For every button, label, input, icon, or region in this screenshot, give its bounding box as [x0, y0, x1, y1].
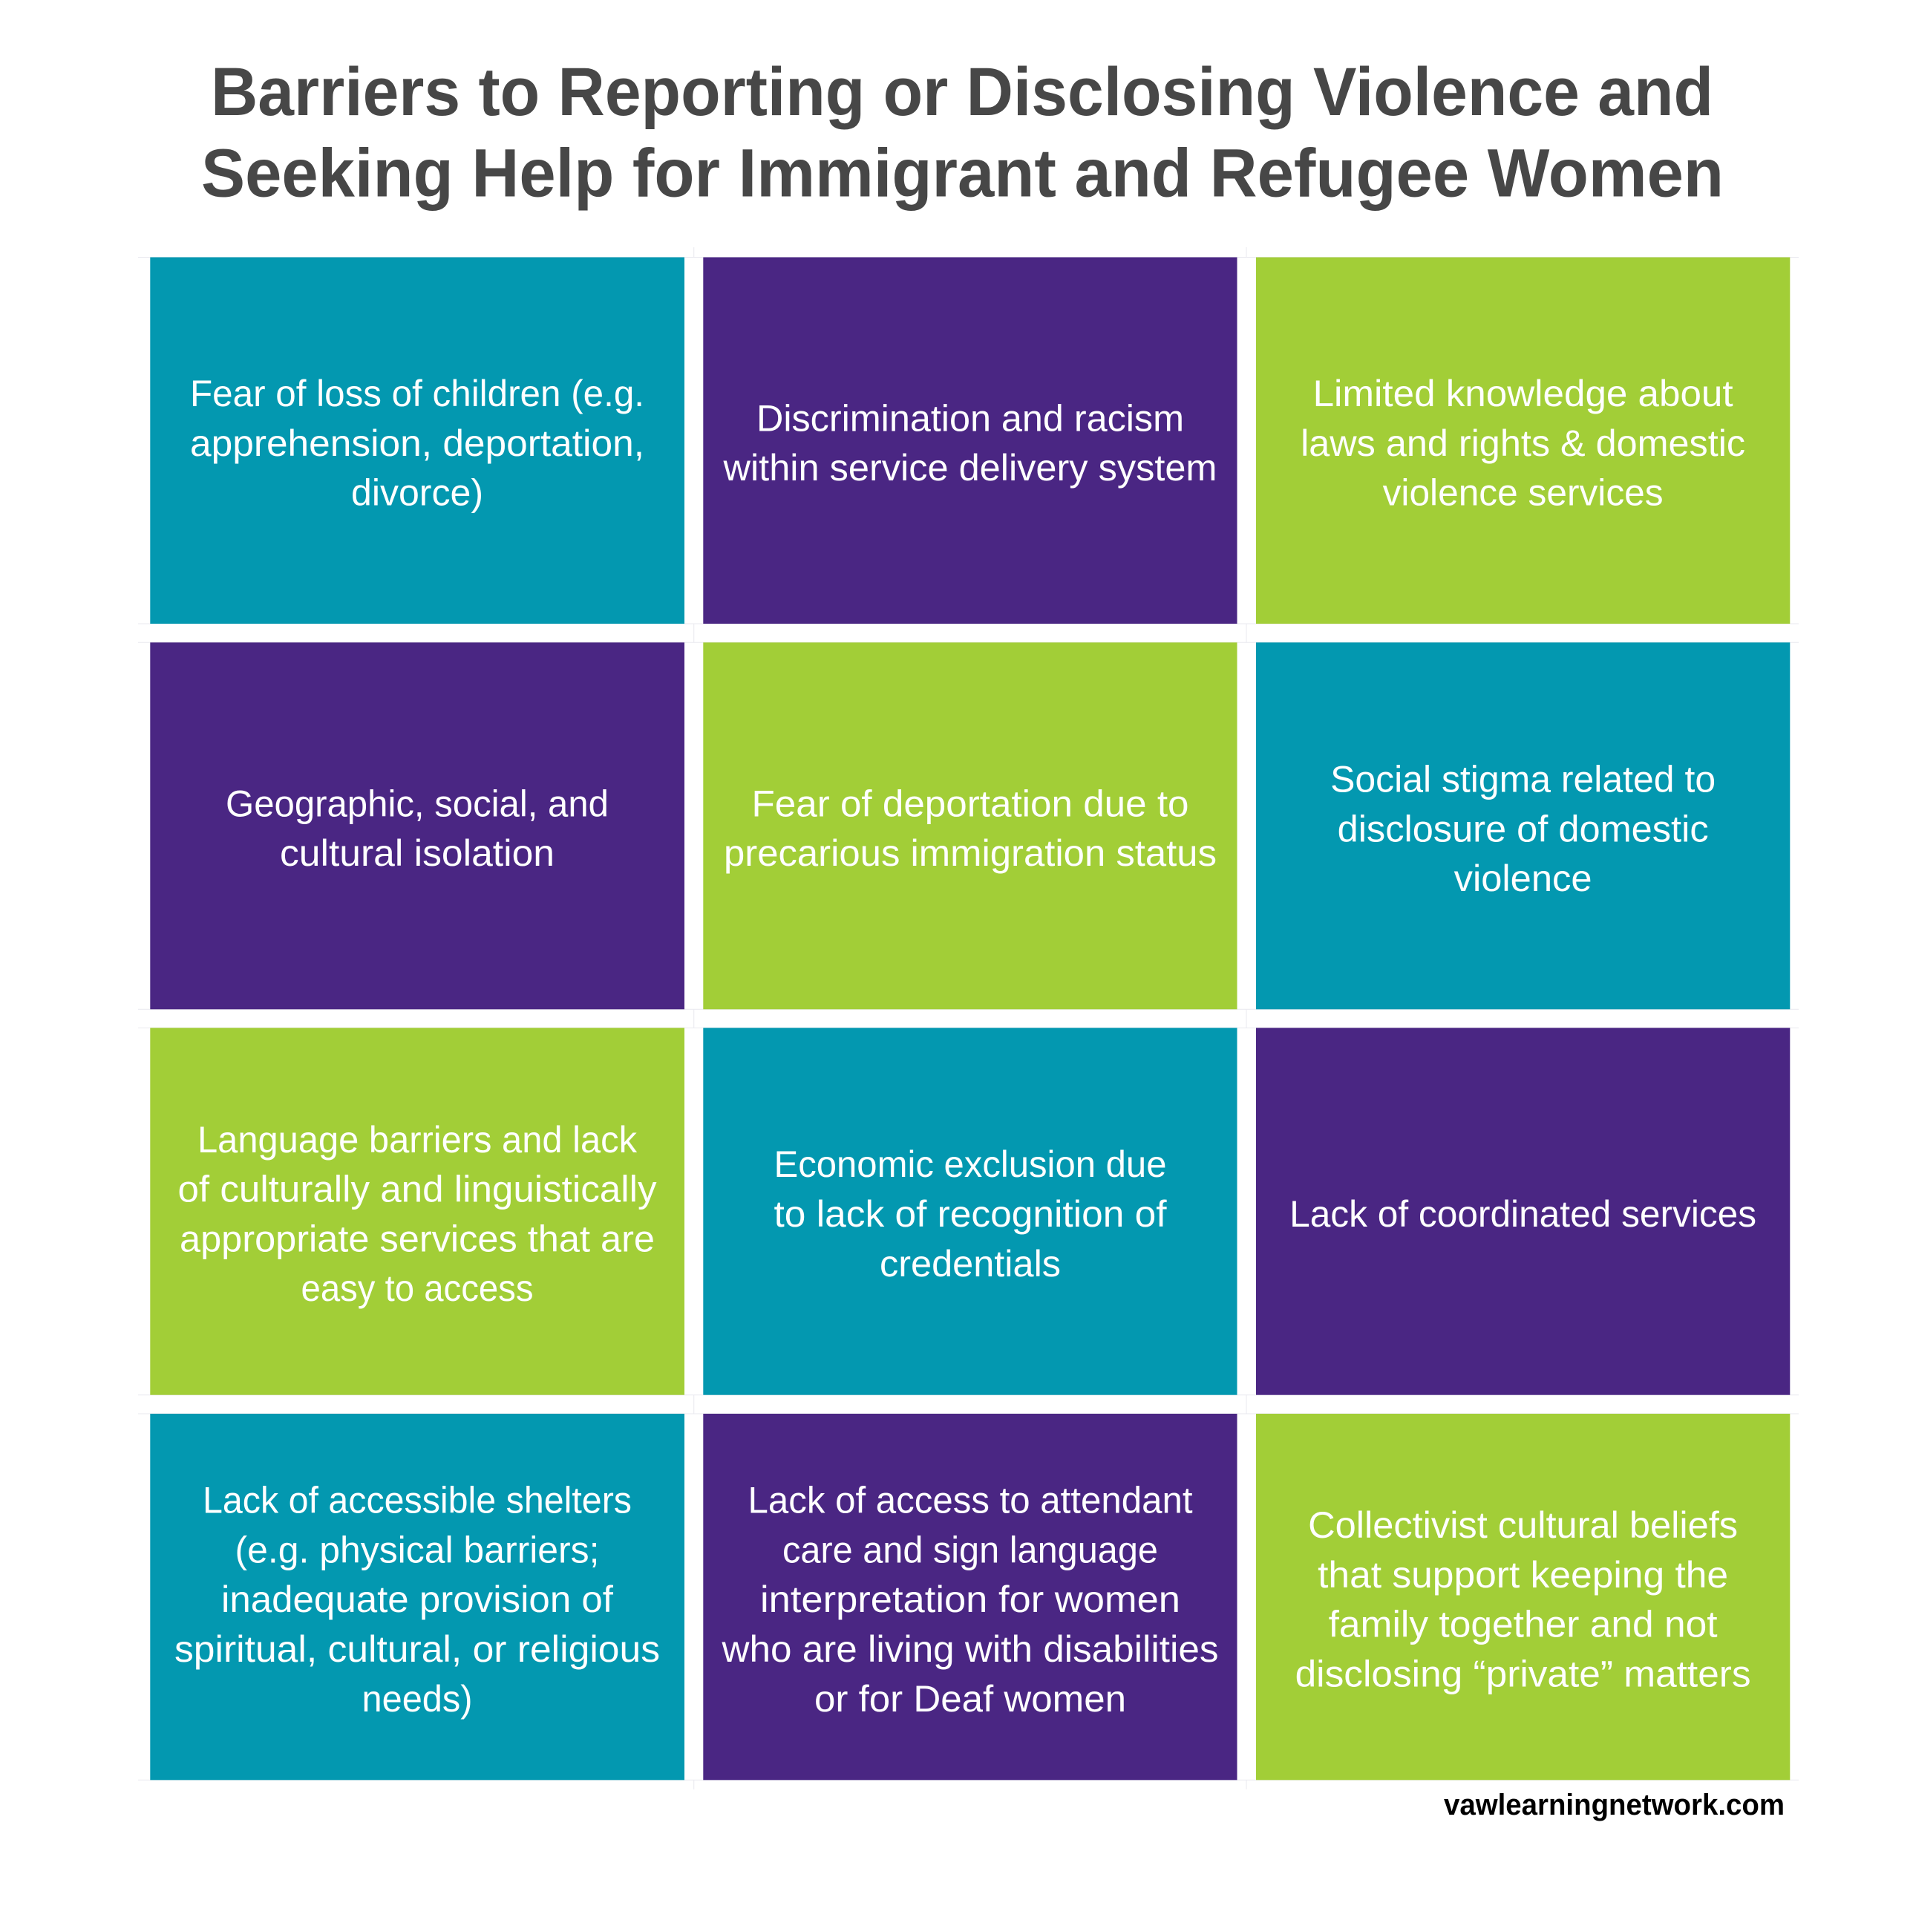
panel text: Discrimination and racism [756, 397, 1184, 439]
panel: fear of loss of children [150, 257, 684, 624]
footer website: vawlearningnetwork.com [1444, 1789, 1785, 1821]
panel text [178, 1119, 656, 1309]
panel text: needs) [362, 1678, 472, 1720]
panel: coordinated services [1256, 1028, 1790, 1395]
panel text: Geographic, social, and [226, 783, 609, 824]
panel text: of culturally and linguistically [178, 1169, 656, 1210]
panel text: Lack of access to attendant [748, 1480, 1193, 1521]
panel text: interpretation for women [760, 1579, 1180, 1620]
panel text [721, 1480, 1219, 1720]
panel text: spiritual, cultural, or religious [174, 1628, 660, 1670]
panel: collectivist cultural beliefs [1256, 1414, 1790, 1780]
panel text [774, 1143, 1167, 1285]
panel text: Collectivist cultural beliefs [1308, 1504, 1738, 1546]
panel text: care and sign language [782, 1529, 1158, 1570]
panel text: appropriate services that are [180, 1218, 655, 1259]
panel text [174, 1480, 660, 1720]
panel: accessible shelters [150, 1414, 684, 1780]
panel: limited knowledge [1256, 257, 1790, 624]
panel text [226, 783, 609, 874]
panel: fear of deportation [703, 642, 1237, 1009]
panel text: family together and not [1329, 1604, 1718, 1645]
panel text: cultural isolation [280, 832, 555, 874]
title: Barriers to Reporting or Disclosing Violence and [211, 54, 1713, 130]
panel text: Social stigma related to [1330, 759, 1716, 800]
panel text: apprehension, deportation, [190, 422, 644, 464]
panel text: credentials [880, 1243, 1061, 1285]
panel text [722, 397, 1217, 489]
panel: discrimination and racism [703, 257, 1237, 624]
panel: language barriers [150, 1028, 684, 1395]
panel: isolation [150, 642, 684, 1009]
panel text: Limited knowledge about [1313, 373, 1733, 414]
panel text: who are living with disabilities [721, 1628, 1219, 1670]
panel text: disclosing “private” matters [1295, 1653, 1751, 1694]
panel text [1301, 373, 1745, 514]
panel text: inadequate provision of [221, 1579, 613, 1620]
panel text: Fear of loss of children (e.g. [190, 373, 644, 414]
panel text: Fear of deportation due to [751, 783, 1189, 824]
title: Seeking Help for Immigrant and Refugee Women [201, 135, 1724, 211]
panel text [190, 373, 644, 514]
panel text: (e.g. physical barriers; [235, 1529, 600, 1570]
panel text: Lack of coordinated services [1289, 1193, 1756, 1235]
panel: attendant care and sign language [703, 1414, 1237, 1780]
panel text [724, 783, 1217, 874]
panel text: or for Deaf women [814, 1678, 1126, 1720]
panel text: Economic exclusion due [774, 1143, 1167, 1185]
panel text: to lack of recognition of [774, 1193, 1167, 1235]
panel text: violence services [1383, 472, 1664, 514]
panel: social stigma [1256, 642, 1790, 1009]
panel text: divorce) [351, 472, 483, 514]
panel text: within service delivery system [722, 447, 1217, 489]
panel text [1330, 759, 1716, 899]
panel text: violence [1454, 858, 1592, 899]
title [201, 54, 1724, 211]
panel: economic exclusion [703, 1028, 1237, 1395]
panel text: laws and rights & domestic [1301, 422, 1745, 464]
panel text: Lack of accessible shelters [203, 1480, 632, 1521]
panel text: that support keeping the [1318, 1554, 1728, 1596]
panel text: easy to access [301, 1267, 533, 1309]
panel text: precarious immigration status [724, 832, 1217, 874]
panel text: disclosure of domestic [1338, 808, 1709, 849]
panel text: Language barriers and lack [197, 1119, 638, 1161]
panel text [1295, 1504, 1751, 1694]
